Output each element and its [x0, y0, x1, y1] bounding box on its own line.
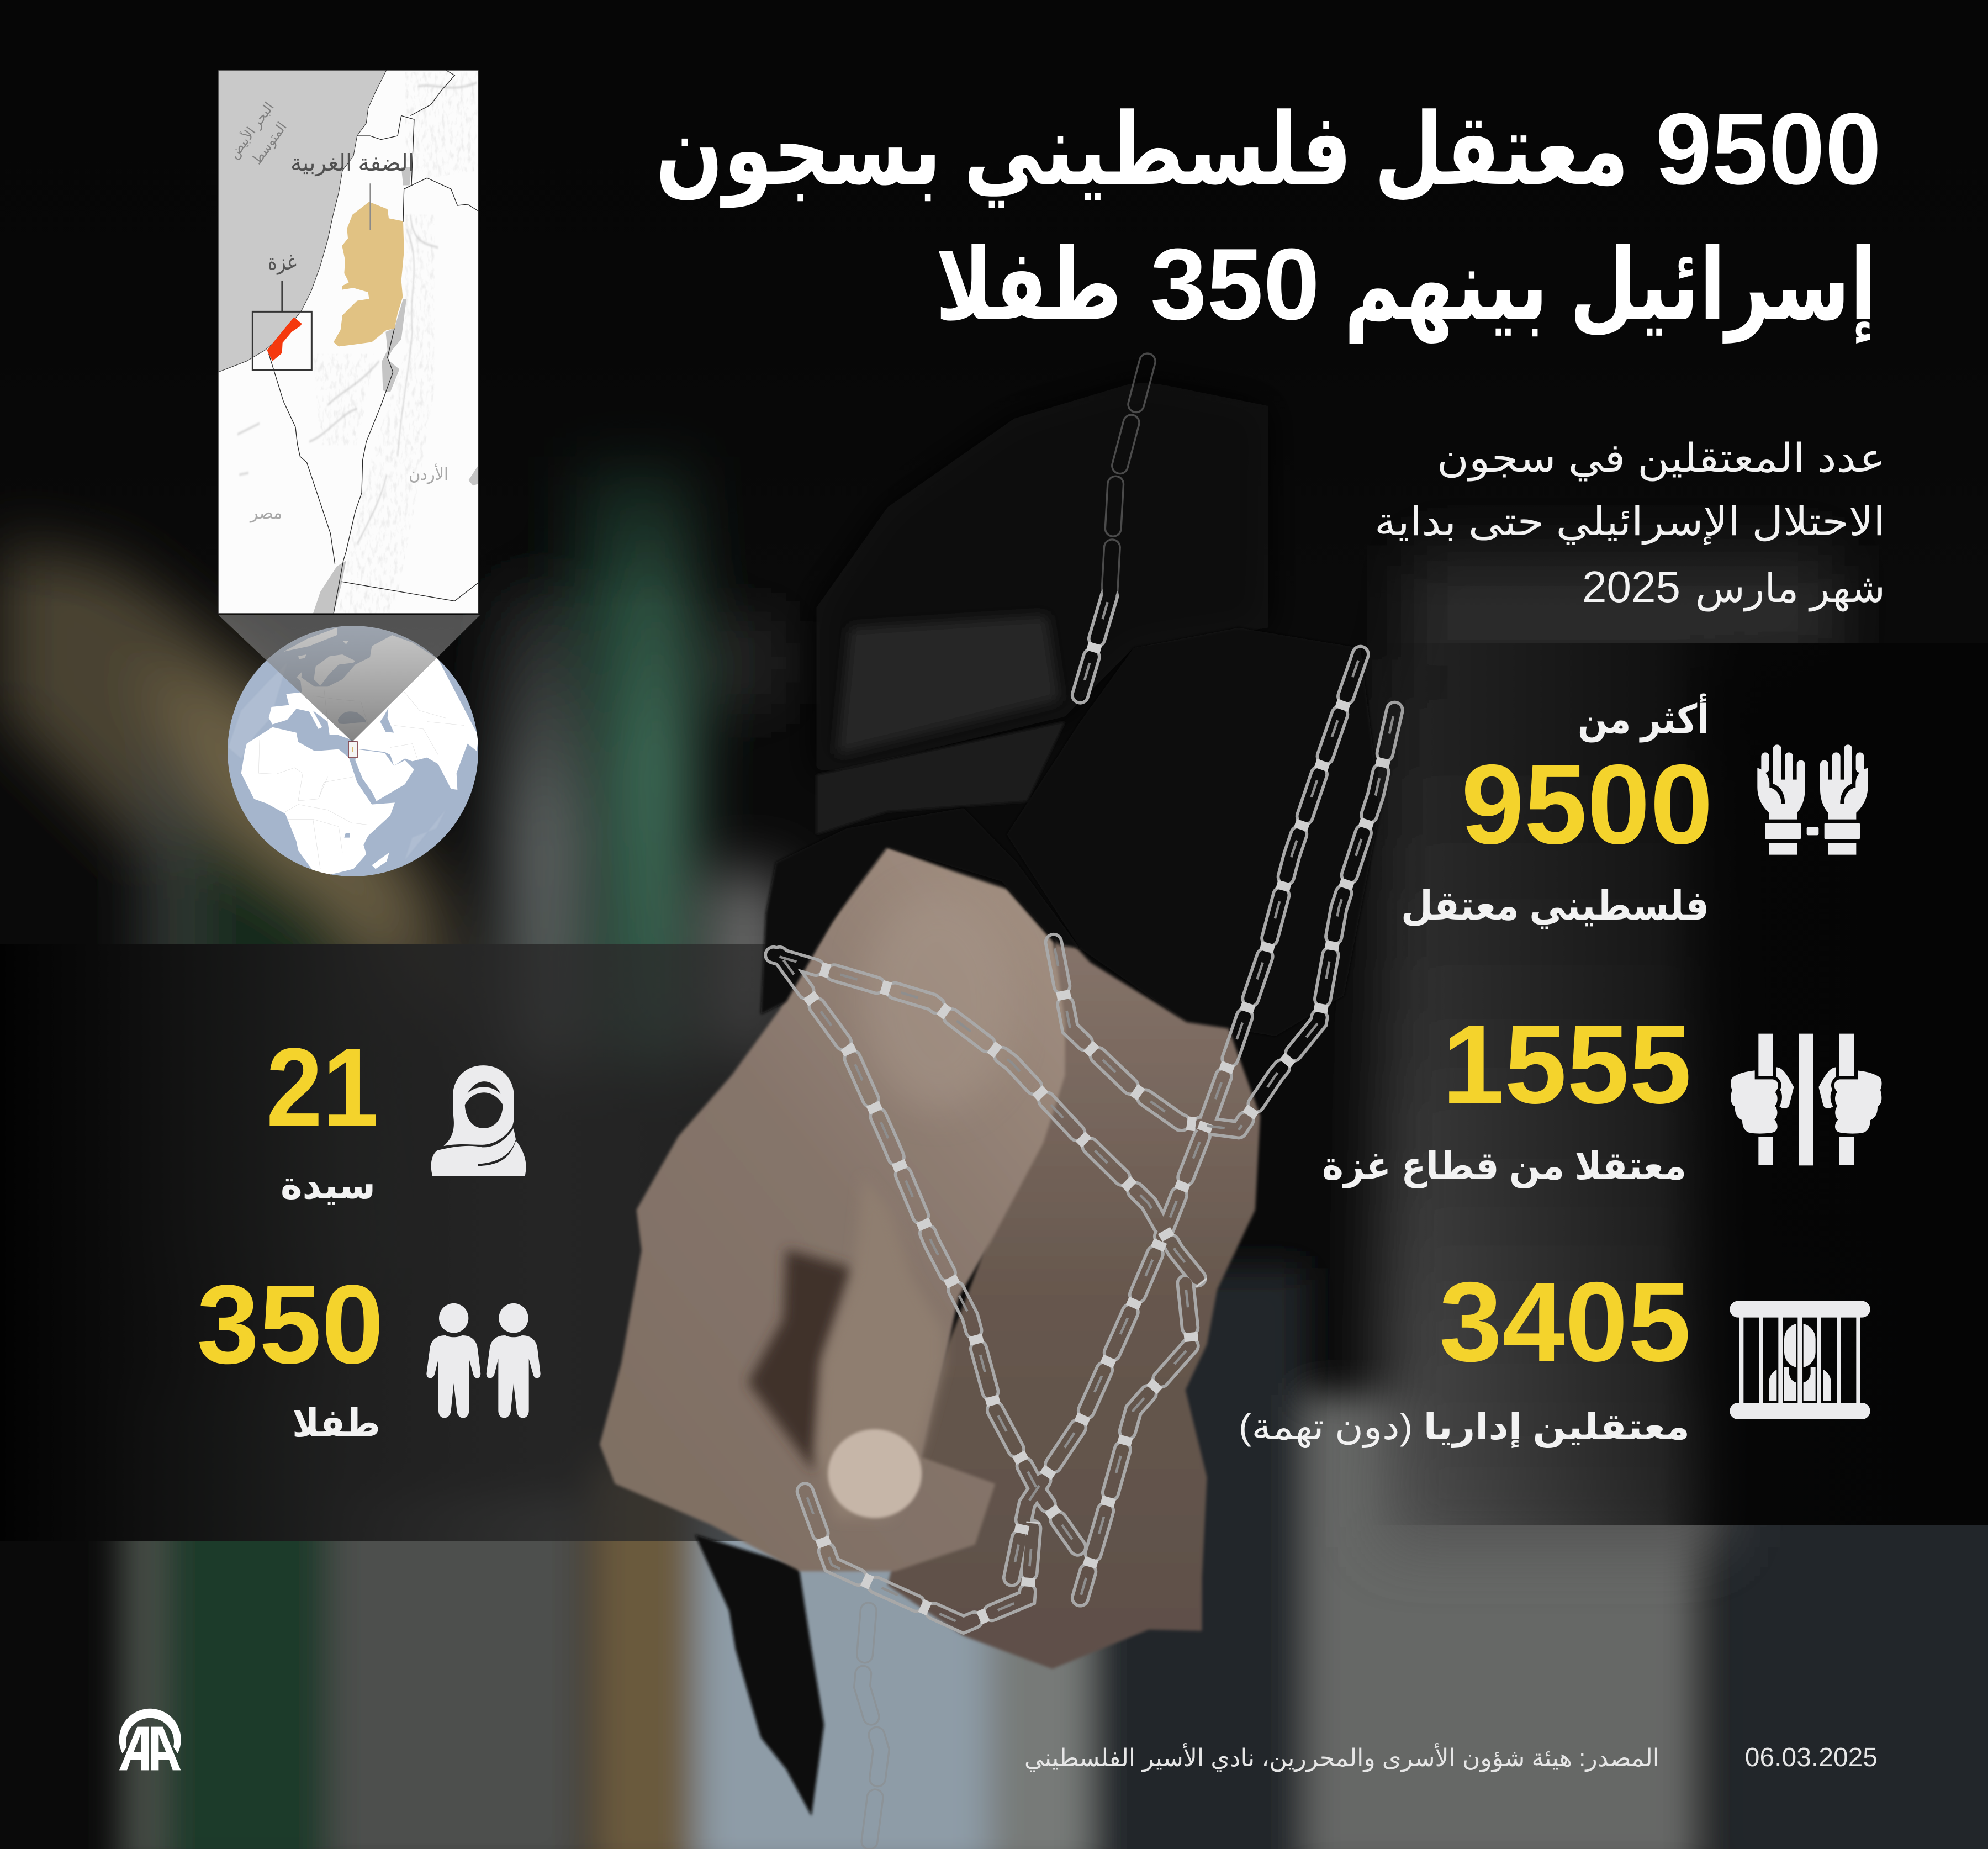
upper sleeve	[817, 381, 1268, 776]
thumb	[817, 1177, 943, 1518]
borders	[258, 689, 464, 869]
black drape	[695, 1535, 824, 1816]
borders	[269, 70, 478, 614]
label: more than: أكثر من	[1578, 693, 1709, 743]
label: west bank: الضفة الغربية	[290, 150, 414, 176]
stat: 350 children	[197, 1262, 541, 1445]
stat: 21 women	[266, 1025, 526, 1207]
globe	[228, 626, 479, 876]
label: palestinian prisoner: فلسطيني معتقل	[1401, 883, 1709, 929]
ocean tone	[228, 663, 446, 860]
terrain	[237, 83, 477, 545]
source text: المصدر: هيئة شؤون الأسرى والمحررين، نادي الأسير الفلسطيني	[1024, 1742, 1659, 1772]
hands and chains photo	[600, 361, 1394, 1849]
number: 21: 21	[266, 1025, 379, 1150]
logo: AA	[119, 1709, 181, 1770]
west bank	[334, 202, 404, 346]
map	[218, 70, 478, 614]
label: mediterranean: المتوسط	[249, 119, 290, 167]
front hand	[600, 844, 1065, 1571]
west bank leader	[369, 183, 371, 230]
sea	[218, 70, 387, 372]
black band over wrist	[761, 808, 1080, 1015]
chains	[773, 596, 1394, 1625]
subtitle text: شهر مارس	[1695, 567, 1885, 612]
number: 1555: 1555	[1442, 1002, 1691, 1127]
funnel	[218, 615, 480, 742]
panel: right dark strip	[1370, 643, 1988, 1525]
subtitle text: 2025	[1582, 562, 1680, 611]
inland seas	[338, 708, 394, 838]
number: 350: 350	[197, 1262, 384, 1387]
sleeve fold	[837, 615, 1060, 754]
label: detainees from gaza: معتقلا من قطاع غزة	[1322, 1144, 1686, 1188]
gaza leader	[281, 281, 283, 311]
thumb nail	[828, 1429, 922, 1518]
subtitle text: عدد المعتقلين في سجون	[1437, 436, 1885, 482]
label: gaza: غزة	[268, 250, 297, 275]
title line 1: 9500	[1656, 92, 1881, 205]
title line 2: 350	[1150, 227, 1320, 341]
faint chains	[862, 361, 1148, 1849]
subtitle text: الاحتلال الإسرائيلي حتى بداية	[1374, 500, 1885, 545]
land	[241, 628, 479, 875]
number: 9500: 9500	[1461, 741, 1713, 868]
icon: two children	[426, 1303, 541, 1418]
date: 06.03.2025	[1745, 1743, 1878, 1772]
hand highlight	[862, 894, 1014, 1110]
stat: 3405 administrative	[1239, 1259, 1870, 1449]
title	[655, 92, 1881, 344]
lakes and gulf	[313, 167, 478, 614]
blurred bottom columns	[120, 1217, 1988, 1849]
label: egypt: مصر	[249, 503, 282, 523]
rear hand	[887, 928, 1260, 1669]
hand shadow	[748, 1249, 852, 1471]
top fade	[0, 0, 1988, 609]
stat: 1555 from gaza	[1322, 1002, 1881, 1188]
ocean	[228, 626, 478, 876]
globe locator box	[348, 742, 357, 758]
title line 2	[935, 227, 1876, 344]
icon: prisoner behind bars	[1730, 1301, 1870, 1419]
gaza box	[252, 311, 311, 370]
stat: 9500 prisoners	[1401, 693, 1868, 929]
gaza strip	[267, 317, 302, 361]
icon: hands on bars	[1731, 1034, 1881, 1165]
title line 2: طفلا	[935, 230, 1122, 341]
land base	[218, 70, 478, 614]
subtitle text	[1374, 436, 1885, 612]
strap	[817, 722, 1065, 834]
blurred upper shapes	[0, 457, 1988, 1547]
title line 1: معتقل فلسطيني بسجون	[655, 94, 1629, 208]
panel: left dark strip	[0, 944, 828, 1541]
sleeve cuff black	[1007, 628, 1381, 1036]
label: children: طفلا	[292, 1402, 380, 1445]
icon: veiled woman	[431, 1065, 526, 1176]
terrain texture	[313, 72, 478, 614]
label: administrative detainees: معتقلين إداريا (دون تهمة)	[1239, 1406, 1690, 1449]
label: jordan: الأردن	[409, 463, 448, 484]
label: mediterranean: البحر الأبيض	[225, 98, 277, 162]
map outline	[218, 70, 478, 614]
number: 3405: 3405	[1439, 1259, 1691, 1385]
label: woman: سيدة	[281, 1164, 376, 1207]
icon: cuffed hands	[1757, 744, 1868, 855]
